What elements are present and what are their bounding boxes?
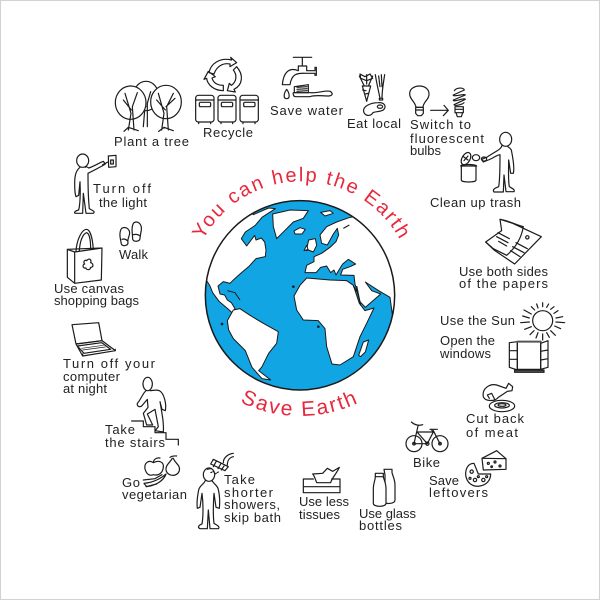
label: at night: at night: [63, 381, 107, 396]
label: of meat: of meat: [466, 425, 518, 440]
red sea: [343, 225, 361, 305]
item: take the stairs: [105, 377, 178, 450]
globe: [204, 200, 396, 391]
uk: [306, 239, 317, 252]
south america: [227, 309, 278, 380]
icon: chicken leg and steak: [483, 383, 515, 412]
label: cut back: Cut back: [466, 411, 524, 426]
atlantic islands: [221, 285, 320, 328]
label: take: Take: [105, 422, 135, 437]
label: bulbs: bulbs: [410, 143, 442, 158]
arrow: [431, 105, 448, 116]
three bins: [196, 95, 258, 124]
caribbean line: [227, 291, 240, 300]
label: windows: windows: [439, 346, 492, 361]
icon: bulb, arrow and CFL: [410, 86, 465, 117]
label: take: Take: [224, 472, 255, 487]
eurasia: [304, 216, 394, 315]
icon: papers: [486, 219, 541, 264]
heading: Save Earth: Save Earth: [242, 390, 357, 416]
icon: bottles: [373, 469, 395, 506]
label: plant a tree: Plant a tree: [114, 134, 189, 149]
item: use less tissues: [299, 467, 350, 522]
icon: person climbing stairs: [132, 377, 178, 445]
ireland: [304, 245, 308, 251]
label: showers,: showers,: [224, 497, 280, 512]
icon: laptop: [72, 323, 115, 356]
label: the stairs: the stairs: [105, 435, 166, 450]
label: open the: Open the: [440, 333, 495, 348]
item: use glass bottles: [359, 469, 416, 533]
label: leftovers: leftovers: [429, 485, 488, 500]
icon: cheese and pizza: [466, 451, 506, 486]
label: bottles: bottles: [359, 518, 402, 533]
title: You can help the Earth: You can help the Earth: [191, 166, 408, 238]
item: save water: [270, 57, 344, 118]
label: shorter: shorter: [224, 485, 274, 500]
label: save water: Save water: [270, 103, 344, 118]
icon: person at trash bin: [459, 132, 514, 192]
item: clean up trash: [430, 132, 521, 210]
item: turn off the light: [75, 154, 151, 213]
item: plant a tree: [114, 81, 189, 149]
label: walk: Walk: [119, 247, 148, 262]
madagascar: [359, 340, 369, 357]
icon: bicycle: [406, 422, 448, 452]
label: computer: computer: [63, 369, 121, 384]
label: use less: Use less: [299, 494, 350, 509]
item: use both sides of the papers: [459, 219, 548, 291]
label: use both sides: Use both sides: [459, 264, 548, 279]
icon: tissue box: [303, 467, 340, 493]
item: open the windows: [439, 333, 548, 372]
label: turn off your: Turn off your: [63, 356, 156, 371]
item: switch to fluorescent bulbs: [410, 86, 484, 158]
label: clean up trash: Clean up trash: [430, 195, 521, 210]
icon: recycling arrows: [196, 57, 258, 124]
label: vegetarian: vegetarian: [122, 487, 187, 502]
icon: canvas bag: [67, 229, 102, 283]
label: tissues: tissues: [299, 507, 340, 522]
icon: window: [509, 341, 548, 372]
label: bike: Bike: [413, 455, 440, 470]
label: use canvas: Use canvas: [54, 281, 124, 296]
label: go: Go: [122, 475, 140, 490]
item: take shorter showers: [197, 453, 281, 529]
item: turn off your computer at night: [63, 323, 156, 396]
label: the light: the light: [99, 195, 147, 210]
item: eat local: [347, 74, 401, 131]
arctic island: [321, 211, 333, 216]
label: use glass: Use glass: [359, 506, 416, 521]
item: recycle: [196, 57, 258, 140]
item: use canvas shopping bags: [54, 229, 140, 308]
item: save leftovers: [429, 451, 506, 500]
label: switch to: Switch to: [410, 117, 471, 132]
greenland: [273, 210, 308, 239]
item: use the sun: [440, 303, 565, 340]
icon: fruit: [143, 456, 180, 487]
label: skip bath: skip bath: [224, 510, 281, 525]
label: fluorescent: fluorescent: [410, 131, 484, 146]
label: recycle: Recycle: [203, 125, 253, 140]
label: use the sun: Use the Sun: [440, 313, 515, 328]
icon: footprints: [120, 222, 141, 246]
icon: person at light switch: [75, 154, 116, 213]
item: cut back of meat: [466, 383, 524, 440]
north america: [207, 208, 276, 313]
icon: sun: [521, 303, 565, 340]
item: walk: [119, 222, 148, 262]
africa: [294, 278, 374, 365]
label: of the papers: of the papers: [459, 276, 548, 291]
item: go vegetarian: [122, 456, 187, 502]
icon: faucet, drop and toothbrush: [282, 57, 332, 99]
icon: trees: [115, 81, 181, 131]
label: save: Save: [429, 473, 459, 488]
icon: vegetables and steak: [359, 74, 385, 115]
item: bike: [406, 422, 448, 470]
label: shopping bags: shopping bags: [54, 293, 140, 308]
iceland: [294, 228, 305, 234]
label: eat local: Eat local: [347, 116, 401, 131]
label: turn off: Turn off: [93, 181, 151, 196]
icon: person in shower: [197, 453, 233, 529]
